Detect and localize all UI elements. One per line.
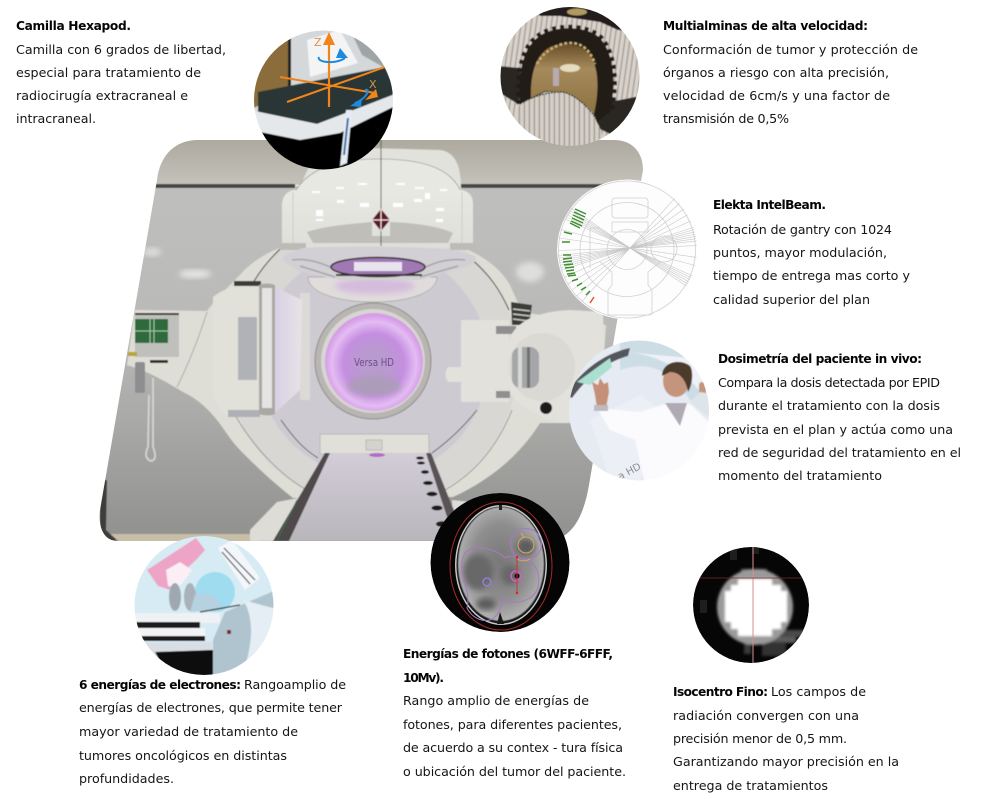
- text: Camilla Hexapod: radiocirugía extracraneal e: [16, 88, 188, 103]
- icon: doctor photo: a HD: [616, 461, 643, 483]
- text: 6 energías de electrones: profundidades.: [79, 771, 174, 786]
- text: Isocentro Fino: [673, 684, 899, 793]
- contours: target volumes: [462, 528, 542, 620]
- text: Energías de fotones: de acuerdo a su contex - tura física: [403, 740, 623, 755]
- text: Dosimetría del paciente in vivo: durante el tratamiento con la dosis: [718, 398, 940, 413]
- icon: hexapod couch photo: [254, 30, 393, 170]
- icon: brain CT scan: [430, 493, 570, 632]
- text: Multialminas de alta velocidad: órganos a riesgo con alta precisión,: [663, 65, 889, 80]
- text: Camilla Hexapod: [16, 19, 226, 126]
- text: Dosimetría del paciente in vivo: momento del tratamiento: [718, 468, 882, 483]
- icon: green tick marks: [562, 209, 594, 303]
- text: 6 energías de electrones: energías de electrones, que permite tener: [79, 700, 343, 715]
- text: Dosimetría del paciente in vivo: red de seguridad del tratamiento en el: [718, 445, 961, 460]
- text: 6 energías de electrones: 6 energías de electrones:: [79, 678, 241, 692]
- text: Dosimetría del paciente in vivo: Dosimetría del paciente in vivo:: [718, 352, 922, 366]
- icon: doctor photo: [565, 338, 713, 484]
- text: Energías de fotones: 10Mv).: [403, 671, 444, 685]
- text: Multialminas de alta velocidad: [663, 19, 918, 126]
- text: Energías de fotones: fotones, para diferentes pacientes,: [403, 717, 622, 732]
- icon: orange axes: X: [369, 78, 377, 91]
- text: Multialminas de alta velocidad: transmisión de 0,5%: [663, 111, 789, 126]
- icon: isocentre field image: [693, 547, 810, 663]
- text: Elekta IntelBeam: Rotación de gantry con 1024: [713, 222, 892, 237]
- icon: electron energies photo: [134, 536, 274, 675]
- label: Versa HD: Versa HD: [354, 357, 394, 369]
- text: Elekta IntelBeam: [713, 198, 910, 307]
- text: Dosimetría del paciente in vivo: Compara la dosis detectada por EPID: [718, 375, 940, 390]
- text: Isocentro Fino: radiación convergen con una: [673, 708, 859, 723]
- text: Energías de fotones: Energías de fotones (6WFF-6FFF,: [403, 647, 613, 661]
- text: Isocentro Fino: Garantizando mayor precisión en la: [673, 754, 899, 769]
- text: Energías de fotones: Rango amplio de energías de: [403, 693, 589, 708]
- text: Camilla Hexapod: Camilla con 6 grados de libertad,: [16, 42, 226, 57]
- text: 6 energías de electrones: mayor variedad de tratamiento de: [79, 724, 298, 739]
- icon: multileaf collimator photo: [498, 4, 643, 150]
- text: 6 energías de electrones: [79, 677, 346, 786]
- text: Isocentro Fino: entrega de tratamientos: [673, 778, 828, 793]
- text: Dosimetría del paciente in vivo: prevista en el plan y actúa como una: [718, 422, 953, 437]
- text: Energías de fotones: o ubicación del tumor del paciente.: [403, 764, 626, 779]
- text: Multialminas de alta velocidad: Conformación de tumor y protección de: [663, 42, 918, 57]
- text: Elekta IntelBeam: tiempo de entrega mas corto y: [713, 268, 910, 283]
- icon: orange axes: Z: [314, 36, 322, 49]
- icon: IntelBeam beam diagram: [557, 180, 698, 320]
- text: Elekta IntelBeam: puntos, mayor modulación,: [713, 245, 887, 260]
- text: Isocentro Fino: Isocentro Fino:: [673, 685, 768, 699]
- text: Elekta IntelBeam: calidad superior del plan: [713, 292, 870, 307]
- text: Energías de fotones: [403, 647, 626, 779]
- text: Dosimetría del paciente in vivo: [718, 352, 961, 483]
- text: Elekta IntelBeam: Elekta IntelBeam.: [713, 198, 826, 212]
- text: Isocentro Fino: precisión menor de 0,5 mm.: [673, 731, 847, 746]
- text: 6 energías de electrones: tumores oncológicos en distintas: [79, 748, 287, 763]
- text: Multialminas de alta velocidad: Multialminas de alta velocidad:: [663, 19, 868, 33]
- panel: Versa HD machine photo: [95, 138, 655, 546]
- text: Isocentro Fino: Los campos de: [771, 684, 866, 699]
- text: Camilla Hexapod: Camilla Hexapod.: [16, 19, 131, 33]
- text: Camilla Hexapod: especial para tratamiento de: [16, 65, 201, 80]
- text: 6 energías de electrones: Rangoamplio de: [244, 677, 346, 692]
- text: Camilla Hexapod: intracraneal.: [16, 111, 96, 126]
- text: Multialminas de alta velocidad: velocidad de 6cm/s y una factor de: [663, 88, 890, 103]
- icon: orange axes: [280, 32, 385, 107]
